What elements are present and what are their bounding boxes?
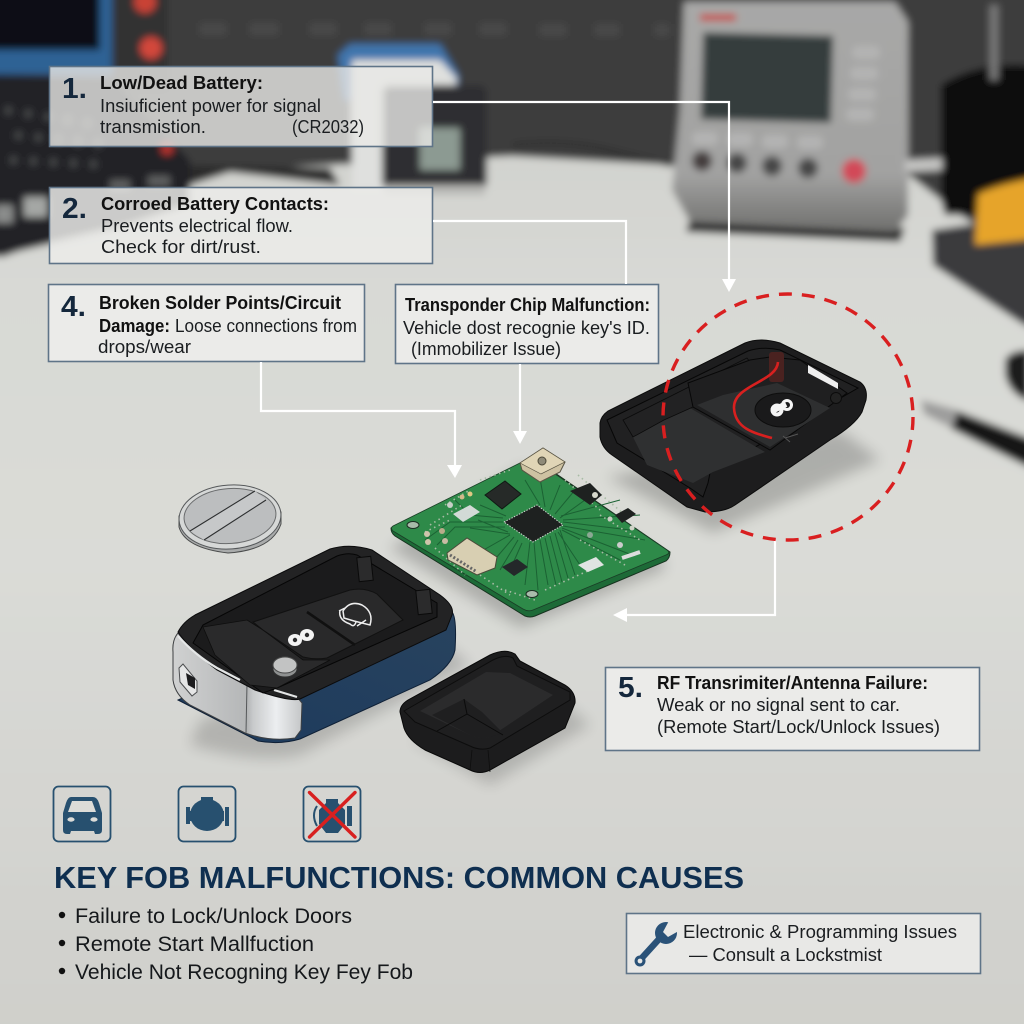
navy side xyxy=(178,612,456,743)
white lock symbol xyxy=(772,400,792,414)
shell: open rear housing with battery compartment xyxy=(600,340,880,533)
arrow: shell to circuit board xyxy=(613,540,775,622)
callout 5: RF transmitter xyxy=(606,668,980,750)
callout: transponder chip xyxy=(396,284,658,364)
callout: consult a locksmith: Electronic & Programming Issues xyxy=(683,922,957,942)
callout: transponder chip: (Immobilizer Issue) xyxy=(411,339,561,359)
bench meter xyxy=(672,2,908,242)
inner recess xyxy=(193,554,437,693)
detached battery cover xyxy=(400,651,590,785)
key slot xyxy=(179,664,197,696)
key fob front housing xyxy=(173,546,470,758)
solder dot texture xyxy=(425,470,640,600)
callout: consult a locksmith: — Consult a Lockstmist xyxy=(689,945,882,965)
dark tool base xyxy=(932,215,1024,330)
black top xyxy=(178,546,452,700)
callout 5: RF transmitter: Weak or no signal sent to car. xyxy=(657,695,900,715)
callout 1: low/dead battery: Insiuficient power for signal xyxy=(100,96,321,116)
callout 5: RF transmitter: (Remote Start/Lock/Unlock Issues) xyxy=(657,717,940,737)
symptom bullet list xyxy=(59,905,413,984)
arrow: battery callout to shell xyxy=(433,102,736,292)
circuit board xyxy=(390,448,670,628)
icon: engine crossed out xyxy=(304,786,360,842)
components xyxy=(407,448,640,598)
orange block xyxy=(975,178,1024,245)
callout 2: corroded contacts: 2. xyxy=(62,193,87,225)
callout 4: broken solder points: Broken Solder Points/Circuit xyxy=(99,293,341,313)
silver fob button xyxy=(273,657,297,677)
callout: transponder chip: Transponder Chip Malfunction: xyxy=(405,295,650,315)
icon: engine xyxy=(178,786,236,842)
white box device xyxy=(338,44,487,195)
alarm bell icon xyxy=(339,603,371,626)
callout 4: broken solder points: 4. xyxy=(61,291,86,323)
shell floor xyxy=(633,408,765,483)
callout 2: corroded contacts: Corroed Battery Contacts: xyxy=(101,194,329,214)
shell inner cavity xyxy=(607,348,858,497)
callout 1: low/dead battery: 1. xyxy=(62,73,87,105)
icon: car xyxy=(54,786,110,842)
symptom bullet list: Vehicle Not Recogning Key Fey Fob xyxy=(75,961,413,984)
keyboard device xyxy=(0,74,190,258)
callout 4: broken solder points: drops/wear xyxy=(98,337,191,357)
shell body xyxy=(600,340,866,512)
arrow: contacts callout to transponder box xyxy=(433,221,626,284)
callout: consult a locksmith xyxy=(626,914,980,974)
callout 1: low/dead battery: transmistion. xyxy=(100,117,206,137)
monitor xyxy=(0,0,168,90)
callout 1: low/dead battery: (CR2032) xyxy=(292,117,364,137)
callout 4: broken solder points xyxy=(48,284,364,362)
icon: wrench xyxy=(634,917,684,966)
dashed highlight circle xyxy=(663,294,913,540)
callout 4: broken solder points: Loose connections from xyxy=(175,316,357,336)
blurred pen xyxy=(921,350,1024,470)
callout 5: RF transmitter: RF Transrimiter/Antenna Failure: xyxy=(657,673,928,693)
title: KEY FOB MALFUNCTIONS: COMMON CAUSES xyxy=(54,860,744,895)
callout 2: corroded contacts xyxy=(50,188,432,264)
coin battery xyxy=(177,482,283,553)
callout 5: RF transmitter: 5. xyxy=(618,672,643,704)
chrome front trim xyxy=(173,633,302,739)
black cylinder xyxy=(905,5,1024,215)
callout 2: corroded contacts: Prevents electrical flow. xyxy=(101,216,293,236)
callout 1: low/dead battery xyxy=(50,66,432,146)
callout 4: broken solder points: Damage: xyxy=(99,316,170,336)
symptom bullet list: Failure to Lock/Unlock Doors xyxy=(75,905,352,928)
arrow: transponder callout to circuit board xyxy=(513,364,527,444)
battery door flap xyxy=(203,620,330,688)
callout: transponder chip: Vehicle dost recognie key's ID. xyxy=(403,318,650,338)
unlock icon xyxy=(288,629,314,646)
button panel xyxy=(253,589,403,659)
compartment xyxy=(688,357,847,450)
callout 1: low/dead battery: Low/Dead Battery: xyxy=(100,73,263,93)
traces xyxy=(425,478,645,590)
arrow: solder callout to circuit board xyxy=(261,362,462,478)
symptom bullet list: Remote Start Mallfuction xyxy=(75,933,314,956)
callout 2: corroded contacts: Check for dirt/rust. xyxy=(101,237,261,257)
